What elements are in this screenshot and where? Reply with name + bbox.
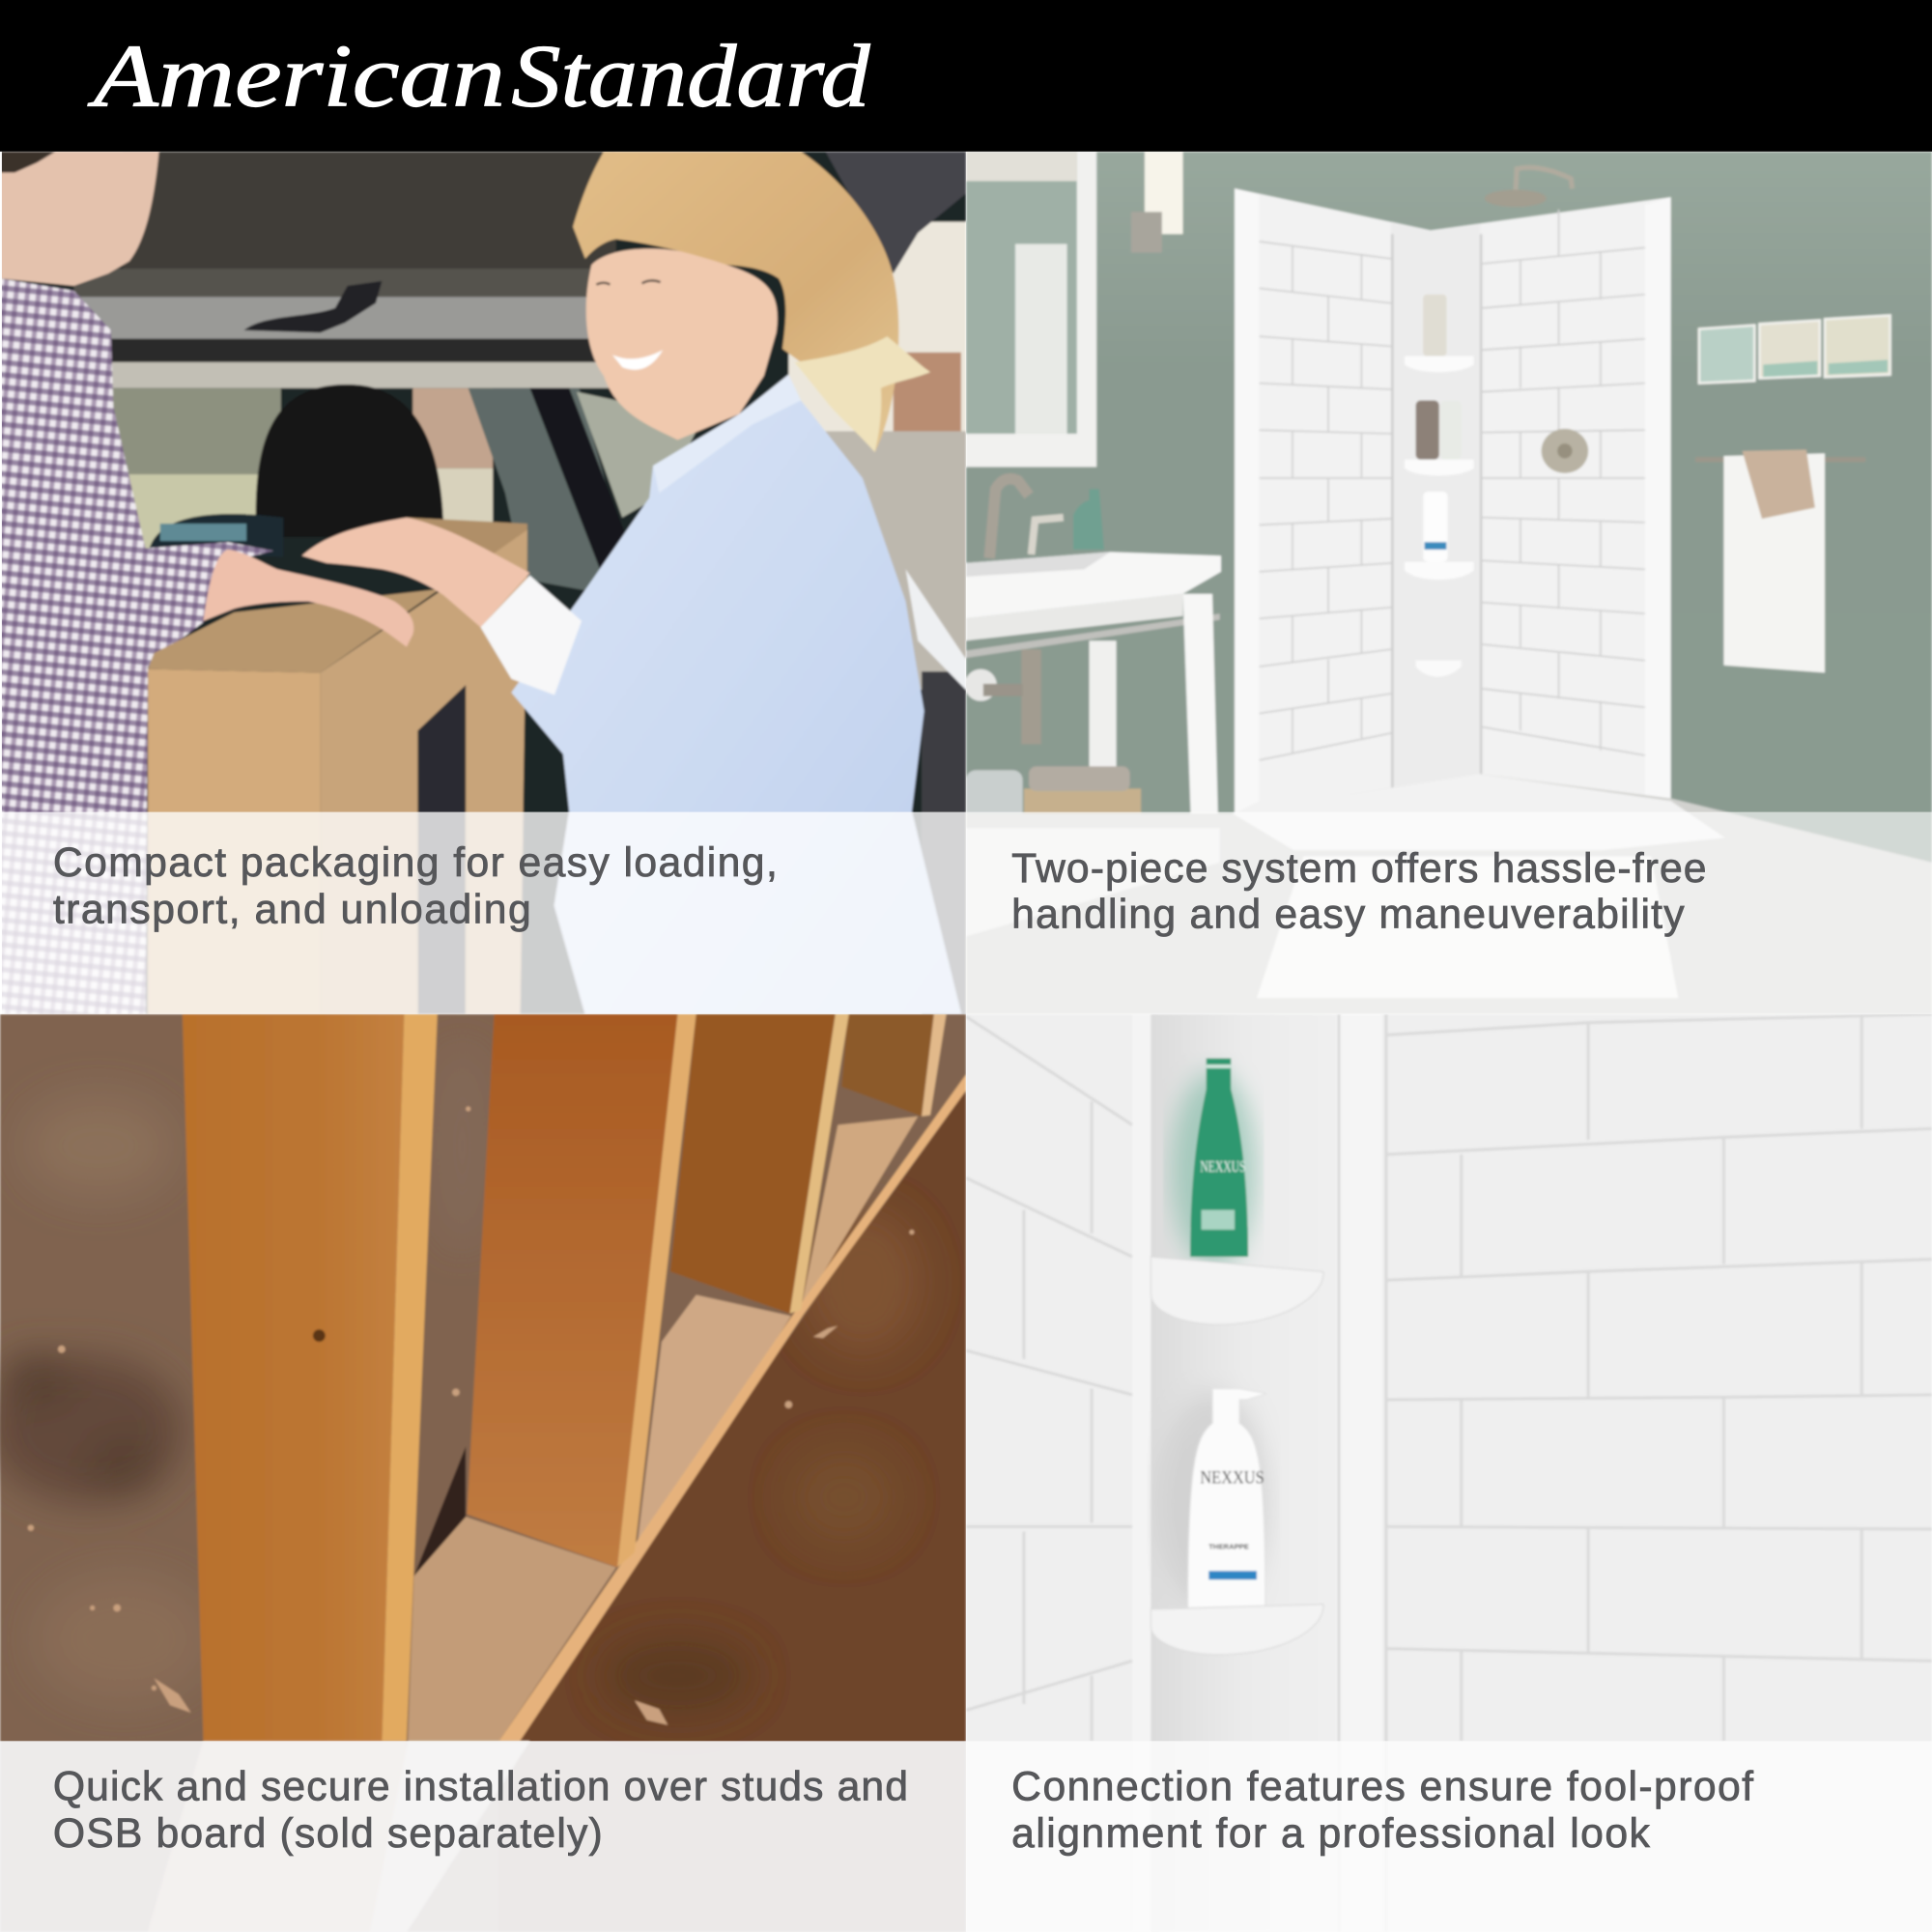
green glow behind bottle xyxy=(1172,1072,1256,1269)
white shampoo bottle: THERAPPE xyxy=(1208,1542,1249,1550)
white shampoo bottle xyxy=(1188,1389,1266,1611)
panel: compact packaging photo xyxy=(0,152,966,1029)
caption: two-piece system xyxy=(1011,845,1707,937)
upper shelf xyxy=(1151,1257,1323,1324)
corner channel xyxy=(1151,1014,1341,1741)
towel bar and towels xyxy=(1695,450,1865,672)
caption: quick and secure installation: OSB board (sold separately) xyxy=(53,1810,603,1857)
lower shelf xyxy=(1151,1605,1323,1655)
white shampoo bottle: NEXXUS xyxy=(1200,1468,1264,1489)
sole plate xyxy=(408,1074,966,1741)
white bottle shadow xyxy=(1158,1392,1269,1614)
logo: American Standard: Standard xyxy=(511,27,871,126)
subway tiles xyxy=(966,1014,1932,1741)
shower valve xyxy=(1542,429,1588,473)
debris chips xyxy=(28,1106,914,1725)
hands on box xyxy=(203,518,529,647)
corner shelves with bottles xyxy=(1405,295,1474,677)
caption: compact packaging: transport, and unloading xyxy=(53,886,531,932)
stud 4 xyxy=(841,1014,947,1117)
caption: connection features xyxy=(1011,1764,1753,1857)
stud 3 xyxy=(670,1014,849,1314)
man in plaid shirt xyxy=(0,152,273,1014)
panel: tile close-up photo xyxy=(966,1014,1932,1741)
cardboard box xyxy=(148,518,527,1014)
stud 2 xyxy=(467,1014,696,1567)
panel: bathroom photo xyxy=(965,152,1932,1014)
logo: American Standard xyxy=(87,27,871,126)
floor right of wall xyxy=(521,1092,966,1741)
header bar with logo xyxy=(0,0,1932,152)
overlay: caption band top left xyxy=(0,812,966,1014)
woman xyxy=(480,152,961,1014)
wall art prints xyxy=(1699,316,1890,384)
floor shading and stains xyxy=(0,1097,471,1681)
overlay: caption band bottom right xyxy=(966,1741,1932,1932)
caption: quick and secure installation: Quick and secure installation over studs and xyxy=(53,1764,908,1810)
caption: two-piece system: Two-piece system offers hassle-free xyxy=(1011,845,1707,892)
mirror xyxy=(966,152,1096,467)
caption: two-piece system: handling and easy maneuverability xyxy=(1011,891,1685,937)
shower head xyxy=(1485,167,1573,207)
wall sconce xyxy=(1131,152,1182,252)
panel: studs photo xyxy=(0,1014,966,1932)
overlay: caption band top right xyxy=(966,812,1932,1014)
caption: compact packaging: Compact packaging for easy loading, xyxy=(53,839,778,886)
shower walls xyxy=(1235,188,1671,813)
soap dispenser xyxy=(1073,489,1104,550)
caption: compact packaging xyxy=(53,839,778,932)
stud 1 xyxy=(183,1014,438,1741)
caption: connection features: alignment for a professional look xyxy=(1011,1810,1651,1857)
green shampoo bottle: NEXXUS xyxy=(1200,1157,1246,1176)
background behind woman xyxy=(788,222,966,443)
floor xyxy=(966,774,1932,1014)
caption: quick and secure installation xyxy=(53,1764,908,1857)
green shampoo bottle xyxy=(1190,1059,1248,1257)
caption: connection features: Connection features ensure fool-proof xyxy=(1011,1764,1753,1810)
overlay: caption band bottom left xyxy=(0,1741,966,1932)
logo: American Standard: American xyxy=(87,27,505,126)
vanity sink xyxy=(965,479,1221,838)
faucet xyxy=(989,479,1029,558)
